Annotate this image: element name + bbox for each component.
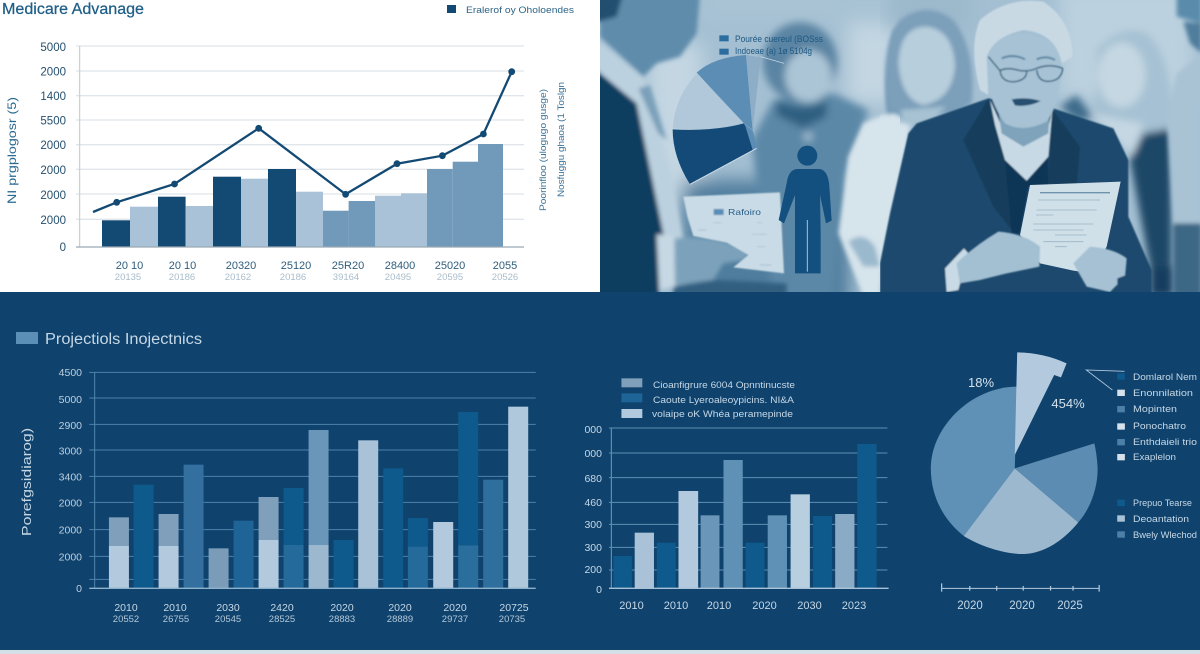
x axis sub labels: 28883 xyxy=(329,614,355,625)
x axis labels: 2420 xyxy=(270,602,294,614)
x axis labels: 2030 xyxy=(797,600,822,612)
pie legend bottom: Deoantation xyxy=(1133,514,1189,525)
x axis sub labels: 20552 xyxy=(113,614,139,625)
x axis sub labels: 20135 xyxy=(115,272,141,283)
legend swatches xyxy=(621,378,642,418)
x axis labels: 20 10 xyxy=(116,260,143,272)
y axis labels: 000 xyxy=(584,424,602,436)
y axis labels: 300 xyxy=(584,519,602,531)
pie percent right: 454% xyxy=(1051,396,1085,411)
x axis sub labels: 39164 xyxy=(333,272,359,283)
y axis labels: 2000 xyxy=(59,524,82,536)
x axis sub labels: 20186 xyxy=(169,272,195,283)
y axis title right xyxy=(538,82,567,211)
legend text xyxy=(652,380,795,420)
y axis labels xyxy=(59,367,82,595)
x axis sub labels: 20495 xyxy=(385,272,411,283)
y axis labels: 4500 xyxy=(59,367,82,379)
pie legend top: Enonnilation xyxy=(1133,388,1193,399)
pie legend top: Enthdaieli trio xyxy=(1133,437,1197,448)
y axis labels: 680 xyxy=(584,473,602,485)
paper xyxy=(1020,182,1121,273)
x axis sub labels: 28525 xyxy=(269,614,295,625)
y axis labels: 2000 xyxy=(40,140,66,152)
y axis labels: 3000 xyxy=(59,446,82,458)
x axis labels xyxy=(114,602,529,614)
pie legend top: Ponochatro xyxy=(1133,421,1186,432)
chart gridlines and axes xyxy=(76,46,524,247)
y axis labels: 460 xyxy=(584,497,602,509)
icon: person xyxy=(779,146,832,273)
x axis labels: 2020 xyxy=(388,602,412,614)
timeline labels xyxy=(957,600,1083,612)
x axis sub labels xyxy=(115,272,518,283)
x axis labels: 2010 xyxy=(163,602,187,614)
photo right half xyxy=(880,0,1200,554)
hair xyxy=(974,1,1073,95)
panel: medicare advantage chart xyxy=(0,0,600,292)
chart: projections bars xyxy=(19,367,536,625)
x axis sub labels: 26755 xyxy=(163,614,189,625)
y axis labels: 300 xyxy=(584,542,602,554)
y axis labels: 2000 xyxy=(40,190,66,202)
pie legend top xyxy=(1133,372,1197,463)
bars xyxy=(613,444,877,589)
y axis title right: Nosfuggu ghaoa (1 Toslgn xyxy=(556,82,567,197)
chart: pie labels xyxy=(957,372,1197,612)
y axis labels xyxy=(584,424,602,596)
y axis labels: 2000 xyxy=(40,165,66,177)
y axis title left: NI prgplogosr (5) xyxy=(5,97,19,204)
y axis labels: 2000 xyxy=(59,498,82,510)
pie chart xyxy=(931,352,1098,554)
x axis labels: 20 10 xyxy=(169,260,196,272)
x axis labels: 25020 xyxy=(435,260,465,272)
pie legend swatches xyxy=(719,35,729,55)
timeline labels: 2020 xyxy=(1009,600,1035,612)
x axis labels: 2020 xyxy=(443,602,467,614)
timeline labels: 2025 xyxy=(1057,600,1083,612)
pie legend bottom: Bwely Wlechod xyxy=(1133,530,1197,541)
bars xyxy=(109,407,528,589)
pie legend top: Mopinten xyxy=(1133,404,1177,415)
left man foreground xyxy=(593,0,787,300)
y axis labels: 5500 xyxy=(40,116,66,128)
x axis labels: 25R20 xyxy=(332,260,364,272)
y axis labels: 000 xyxy=(584,448,602,460)
y axis labels xyxy=(40,42,66,254)
x axis labels: 2010 xyxy=(114,602,138,614)
x axis labels: 28400 xyxy=(385,260,415,272)
pie legend swatches xyxy=(1117,373,1125,538)
x axis labels: 2030 xyxy=(216,602,240,614)
x axis labels: 20725 xyxy=(499,602,529,614)
x axis labels xyxy=(116,260,517,272)
middle woman xyxy=(867,10,973,237)
x axis sub labels: 20735 xyxy=(499,614,525,625)
y axis labels: 200 xyxy=(584,564,602,576)
legend text: volaipe oK Whéa peramepinde xyxy=(652,409,793,420)
pie percent left: 18% xyxy=(968,375,994,390)
y axis labels: 2000 xyxy=(40,66,66,78)
legend text: Caoute Lyeroaleoypicins. NI&A xyxy=(653,395,795,406)
legend: Eralerof oy Oholoendes xyxy=(466,5,574,16)
x axis sub labels: 20186 xyxy=(280,272,306,283)
y axis labels: 0 xyxy=(60,242,66,254)
y axis labels: 1400 xyxy=(40,91,66,103)
center man xyxy=(880,1,1152,293)
line chart xyxy=(93,68,515,212)
panel: photo of seniors reviewing documents xyxy=(593,0,1200,313)
left document xyxy=(683,192,784,273)
section heading: Projectiols Inojectnics xyxy=(45,331,202,348)
x axis labels: 25120 xyxy=(281,260,311,272)
legend text: Cioanfigrure 6004 Opnntinucste xyxy=(653,380,795,391)
y axis labels: 2900 xyxy=(59,420,82,432)
pie legend bottom xyxy=(1133,498,1197,541)
y axis labels: 3400 xyxy=(59,472,82,484)
y axis labels: 2000 xyxy=(59,552,82,564)
photo pie legend text xyxy=(735,34,823,56)
x axis sub labels: 20526 xyxy=(492,272,518,283)
timeline labels: 2020 xyxy=(957,600,983,612)
y axis labels: 5000 xyxy=(59,394,82,406)
overlay pie chart xyxy=(673,55,784,184)
x axis labels: 20320 xyxy=(226,260,256,272)
x axis labels: 2010 xyxy=(664,600,688,612)
pie legend bottom: Prepuo Tearse xyxy=(1133,498,1192,509)
x axis labels: 2010 xyxy=(619,600,644,612)
pie timeline axis xyxy=(942,583,1099,592)
hands xyxy=(957,232,1127,292)
photo pie legend text: Indoeae (a) 1ø 5104g xyxy=(735,46,812,56)
pie legend top: Domlarol Nem xyxy=(1133,372,1197,383)
panel: dark projections section xyxy=(0,292,1200,654)
y axis labels: 0 xyxy=(76,583,82,595)
bar chart xyxy=(102,144,503,247)
y axis labels: 5000 xyxy=(40,42,66,54)
glasses xyxy=(988,57,1063,82)
photo left half xyxy=(600,0,900,292)
x axis sub labels xyxy=(113,614,525,625)
x axis sub labels: 20595 xyxy=(437,272,463,283)
right foreground woman top xyxy=(838,20,907,297)
photo pie legend text: Pourée cuereul (BOSss xyxy=(735,34,823,44)
far woman xyxy=(752,22,868,300)
far right person xyxy=(1167,0,1200,297)
title: Medicare Advanage xyxy=(2,1,144,18)
x axis sub labels: 20162 xyxy=(225,272,251,283)
x axis labels: 2020 xyxy=(330,602,354,614)
y axis title: Porefgsidiarog) xyxy=(19,428,34,536)
background blur xyxy=(647,0,913,313)
document label: Rafoiro xyxy=(728,207,761,217)
x axis sub labels: 28889 xyxy=(387,614,413,625)
background blur xyxy=(887,0,1193,100)
x axis labels xyxy=(619,600,866,612)
y axis title right: Poorinfloo (ulogugo gusge) xyxy=(538,89,549,211)
x axis sub labels: 29737 xyxy=(442,614,468,625)
x axis labels: 2020 xyxy=(752,600,777,612)
x axis labels: 2055 xyxy=(493,260,517,272)
chart: middle bars xyxy=(584,352,1125,612)
x axis sub labels: 20545 xyxy=(215,614,241,625)
y axis labels: 2000 xyxy=(40,215,66,227)
y axis labels: 0 xyxy=(596,584,602,596)
face xyxy=(983,33,1062,128)
x axis labels: 2023 xyxy=(842,600,866,612)
right woman xyxy=(1060,31,1173,297)
pie callout line xyxy=(1086,370,1124,390)
x axis labels: 2010 xyxy=(707,600,731,612)
pie legend top: Exaplelon xyxy=(1133,452,1176,463)
